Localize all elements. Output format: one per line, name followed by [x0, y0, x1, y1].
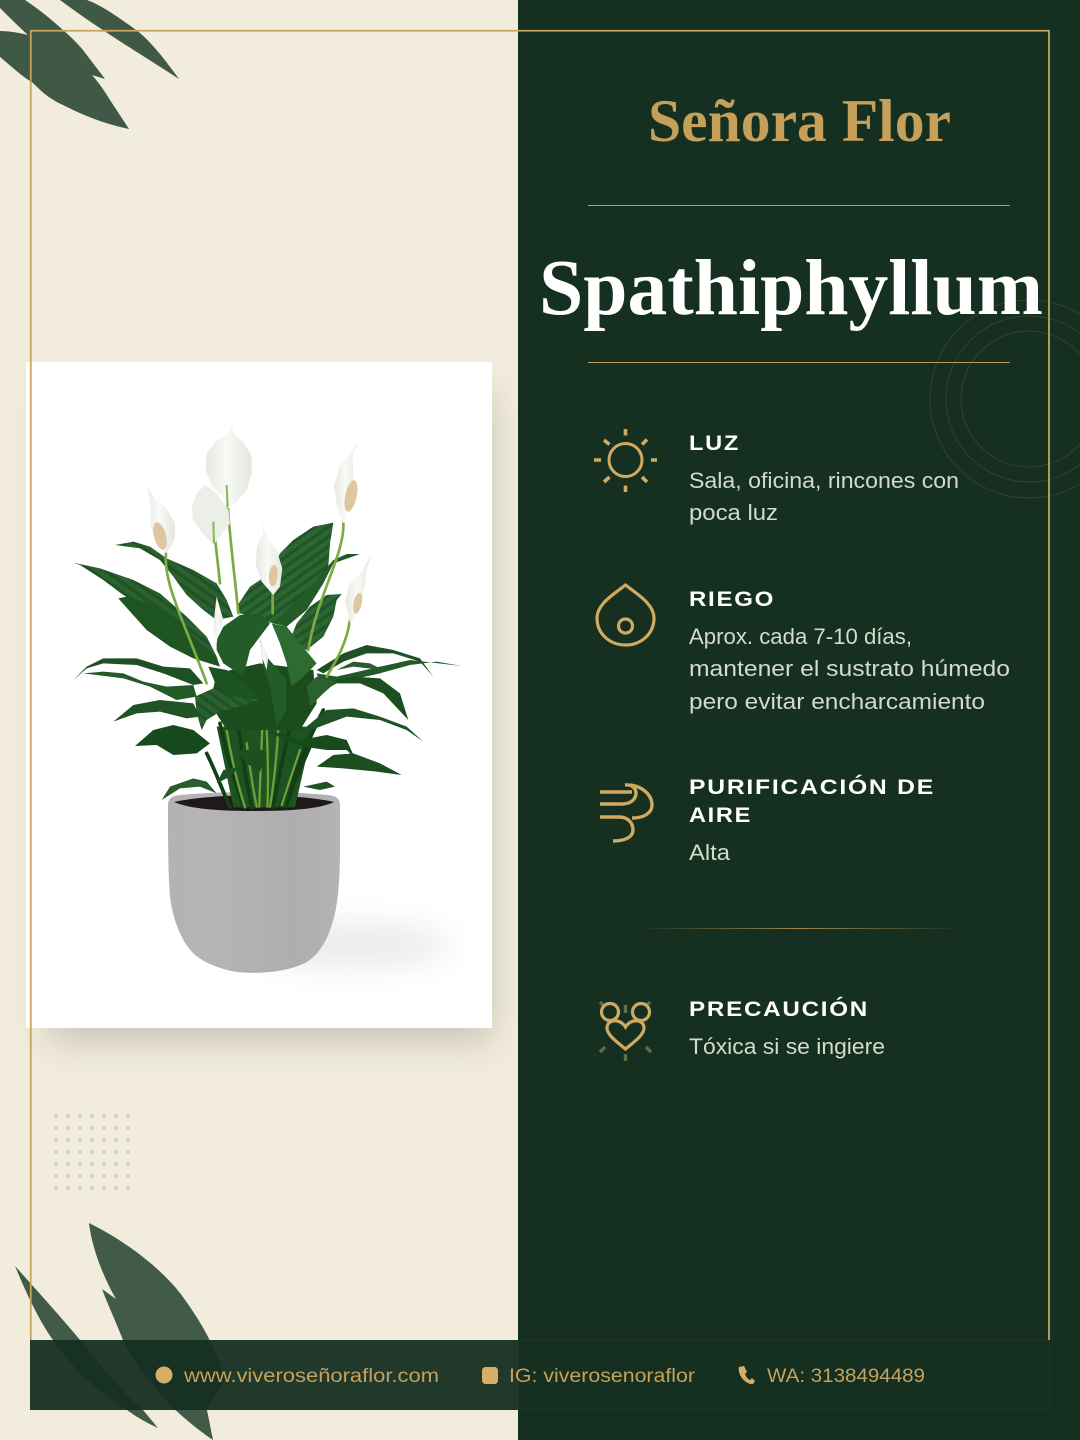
icon: sun — [594, 429, 657, 492]
decoration: bottom-left leaves — [15, 1223, 225, 1440]
panel: dark green background — [518, 0, 1080, 1440]
pot shadow — [250, 925, 450, 965]
text: luz body: Sala, oficina, rincones con — [689, 468, 959, 493]
flower stalks — [166, 487, 350, 683]
photo card: potted peace lily — [26, 362, 492, 1042]
footer whatsapp: WA: 3138494489 — [767, 1366, 925, 1387]
divider bottom — [588, 362, 1010, 363]
stem mass — [217, 727, 313, 807]
plant pot — [168, 792, 340, 973]
icon: wind — [600, 785, 652, 841]
heading: purificacion: AIRE — [689, 804, 752, 827]
icon: water drop — [597, 585, 654, 645]
heading: riego: RIEGO — [689, 588, 775, 611]
divider fading — [635, 928, 965, 929]
text: riego body: Aprox. cada 7-10 días, — [689, 624, 912, 649]
footer bar — [30, 1340, 1050, 1410]
text: precaucion body: Tóxica si se ingiere — [689, 1034, 885, 1059]
footer instagram: IG: viverosenoraflor — [509, 1366, 696, 1387]
section: caution — [600, 997, 885, 1061]
text: purificacion body: Alta — [689, 840, 731, 865]
side thin leaves — [73, 658, 203, 685]
heading: purificacion: PURIFICACIÓN DE — [689, 775, 935, 799]
text: luz body: poca luz — [689, 500, 778, 525]
plant name: Spathiphyllum — [539, 245, 1043, 332]
brand title: Señora Flor — [648, 88, 951, 154]
decoration: dot grid — [54, 1114, 130, 1190]
mid filler — [210, 663, 317, 730]
panel: cream background — [0, 0, 518, 1440]
footer website: www.viveroseñoraflor.com — [183, 1366, 439, 1387]
section: air purification — [600, 775, 935, 865]
section: watering — [597, 585, 1010, 714]
icon: heart with circles — [600, 1002, 651, 1061]
divider top — [588, 205, 1010, 206]
front leaves — [217, 613, 270, 677]
white flower bracts — [145, 424, 372, 670]
stalks — [207, 670, 323, 807]
heading: purificacion — [689, 775, 935, 827]
section: light — [594, 429, 959, 525]
text: riego body — [689, 624, 1010, 714]
heading: luz: LUZ — [689, 432, 740, 455]
decorative concentric circles — [930, 300, 1080, 498]
flower spadices — [151, 479, 364, 615]
heading: precaucion: PRECAUCIÓN — [689, 997, 869, 1021]
text: riego body: pero evitar encharcamiento — [689, 689, 985, 714]
text: luz body — [689, 468, 959, 525]
decoration: top-left leaves — [0, 0, 179, 129]
plant foliage — [73, 424, 462, 807]
text: riego body: mantener el sustrato húmedo — [689, 656, 1010, 681]
back leaves — [237, 523, 333, 627]
